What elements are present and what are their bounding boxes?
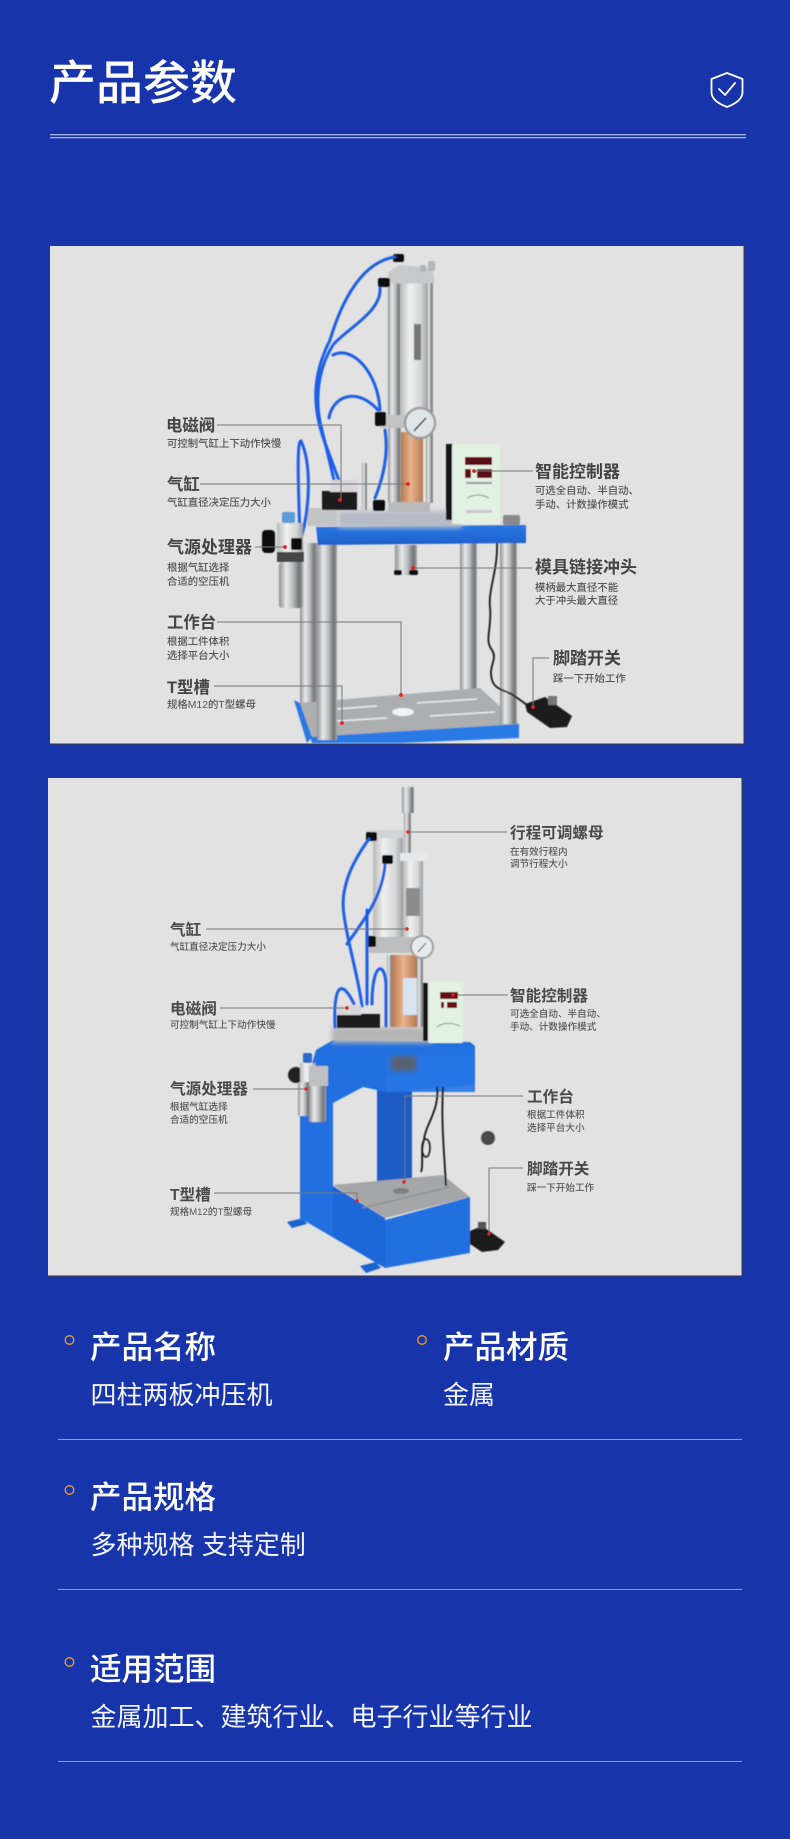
frame left column and head xyxy=(300,1040,475,1237)
air cylinders xyxy=(368,787,428,1027)
callout: cylinder: 气缸 xyxy=(167,475,200,494)
callout: controller xyxy=(451,986,606,1033)
air cylinder xyxy=(380,261,435,512)
callout: controller: 手动、计数操作模式 xyxy=(535,498,629,511)
callout: T slot: T型槽 xyxy=(167,679,210,697)
callout: worktable: 根据工件体积 xyxy=(527,1109,585,1121)
spec: product name xyxy=(65,1329,273,1410)
callout: controller: 可选全自动、半自动、 xyxy=(535,484,639,497)
title: 产品参数 xyxy=(49,56,237,110)
callout: T slot: 规格M12的T型螺母 xyxy=(170,1206,252,1218)
callout: air source unit: 气源处理器 xyxy=(170,1080,248,1098)
blue air hoses xyxy=(335,839,386,1027)
callout: die connector: 模柄最大直径不能 xyxy=(535,581,619,594)
callout: worktable: 工作台 xyxy=(167,613,216,632)
spec: scope of use: 适用范围 xyxy=(90,1651,216,1687)
callout: solenoid valve: 电磁阀 xyxy=(170,1000,217,1018)
spec: material: 金属 xyxy=(443,1380,495,1410)
callouts xyxy=(170,824,606,1236)
spec: material: 产品材质 xyxy=(443,1329,569,1365)
callout: die connector xyxy=(411,557,637,607)
spec: material xyxy=(418,1329,569,1410)
machine: C-frame press xyxy=(287,787,505,1273)
spec: size xyxy=(65,1479,306,1560)
small round mark xyxy=(481,1131,495,1145)
solenoid valve xyxy=(337,1005,380,1028)
smart controller xyxy=(423,982,463,1043)
callout: foot switch: 踩一下开始工作 xyxy=(553,672,626,685)
callout: air source unit: 根据气缸选择 xyxy=(170,1101,228,1113)
pressure gauge xyxy=(411,936,433,958)
frame column back xyxy=(377,1090,412,1182)
callout: cylinder: 气缸直径决定压力大小 xyxy=(167,496,272,509)
table xyxy=(307,508,526,545)
blue air hoses xyxy=(298,257,395,542)
punch xyxy=(394,545,418,575)
header xyxy=(49,56,746,138)
header divider xyxy=(50,134,746,138)
callout: foot switch: 脚踏开关 xyxy=(553,649,621,668)
icon: shield with check xyxy=(712,73,742,107)
callout: solenoid valve xyxy=(166,417,342,502)
callout: foot switch: 脚踏开关 xyxy=(527,1160,590,1178)
callout: foot switch xyxy=(531,649,626,709)
callout: stroke nut xyxy=(406,824,604,870)
spec: size: 多种规格 支持定制 xyxy=(90,1530,306,1560)
callout: worktable xyxy=(402,1087,585,1184)
callout: solenoid valve xyxy=(170,1000,349,1031)
callout: solenoid valve: 可控制气缸上下动作快慢 xyxy=(170,1019,276,1031)
cables xyxy=(421,1087,446,1186)
base plate xyxy=(294,688,519,743)
callout: controller: 可选全自动、半自动、 xyxy=(510,1008,606,1020)
front columns xyxy=(317,543,517,740)
blurred top plate xyxy=(332,1027,433,1043)
callout: T slot: 规格M12的T型螺母 xyxy=(167,698,256,711)
adjustment knob xyxy=(503,515,520,525)
callout: air source unit: 合适的空压机 xyxy=(170,1114,228,1126)
foot switch xyxy=(470,1222,505,1252)
callout: die connector: 模具链接冲头 xyxy=(535,557,637,577)
solenoid valve xyxy=(322,463,367,510)
fittings xyxy=(366,832,393,947)
power cable xyxy=(488,543,530,707)
callout: controller: 智能控制器 xyxy=(510,986,588,1005)
callout: foot switch: 踩一下开始工作 xyxy=(527,1182,595,1194)
callout: cylinder: 气缸直径决定压力大小 xyxy=(170,941,266,953)
callout: solenoid valve: 电磁阀 xyxy=(166,417,215,435)
base box xyxy=(300,1175,470,1268)
callout: air source unit: 合适的空压机 xyxy=(167,575,230,588)
spec: size: 产品规格 xyxy=(90,1479,216,1515)
callout: worktable: 选择平台大小 xyxy=(167,649,230,662)
callout: foot switch xyxy=(487,1160,595,1236)
callout: stroke nut: 行程可调螺母 xyxy=(510,824,604,842)
callout: controller: 智能控制器 xyxy=(535,462,620,482)
callout: T slot: T型槽 xyxy=(170,1186,211,1204)
callout: air source unit: 根据气缸选择 xyxy=(167,561,230,574)
callout: T slot xyxy=(170,1186,359,1218)
back columns xyxy=(300,543,477,707)
callout: worktable: 选择平台大小 xyxy=(527,1122,585,1134)
callout: cylinder: 气缸 xyxy=(170,920,202,939)
callout: solenoid valve: 可控制气缸上下动作快慢 xyxy=(167,437,282,450)
callout: controller: 手动、计数操作模式 xyxy=(510,1021,597,1033)
callout: worktable: 根据工件体积 xyxy=(167,635,230,648)
panel: C-frame press diagram xyxy=(48,778,742,1276)
foot switch xyxy=(525,696,572,728)
smart controller xyxy=(446,444,500,524)
air source treatment unit xyxy=(288,1053,328,1122)
air source treatment unit xyxy=(262,512,304,608)
callout: die connector: 大于冲头最大直径 xyxy=(535,594,618,607)
panel: four-column press diagram xyxy=(50,246,744,744)
machine: four-column press xyxy=(262,254,572,743)
feet xyxy=(287,1218,381,1273)
callout: air source unit xyxy=(167,538,287,588)
callout: stroke nut: 在有效行程内 xyxy=(510,846,568,858)
callout: worktable xyxy=(167,613,403,697)
callout: air source unit xyxy=(170,1080,308,1126)
spec: product name: 四柱两板冲压机 xyxy=(90,1380,273,1410)
pressure gauge xyxy=(405,408,435,438)
spec: product name: 产品名称 xyxy=(90,1329,216,1365)
spec: scope of use xyxy=(65,1651,533,1732)
callout: air source unit: 气源处理器 xyxy=(167,538,252,557)
callouts xyxy=(166,417,639,725)
callout: cylinder xyxy=(167,475,410,509)
callout: cylinder xyxy=(170,920,409,953)
callout: T slot xyxy=(167,679,344,725)
callout: stroke nut: 调节行程大小 xyxy=(510,858,568,870)
callout: controller xyxy=(472,462,639,511)
fittings xyxy=(373,254,404,511)
panel: product specifications xyxy=(58,1329,742,1762)
spec: scope of use: 金属加工、建筑行业、电子行业等行业 xyxy=(90,1702,533,1732)
callout: worktable: 工作台 xyxy=(527,1087,574,1106)
